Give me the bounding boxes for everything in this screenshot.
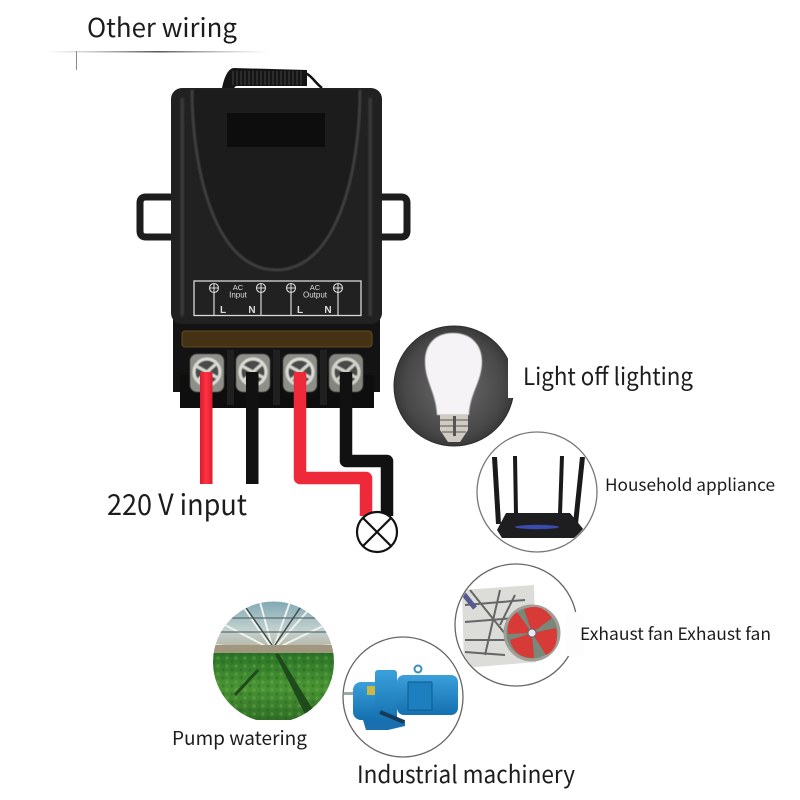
icon: greenhouse bbox=[212, 600, 336, 722]
label: Pump watering: Pump watering bbox=[172, 724, 307, 751]
icon: router bbox=[477, 432, 597, 552]
amber cover strip bbox=[182, 331, 372, 347]
left mounting ear bbox=[140, 197, 171, 237]
input wire: black neutral bbox=[246, 372, 258, 484]
terminal label plate: AC bbox=[233, 283, 244, 292]
label: 220 V input: 220 V input bbox=[107, 482, 247, 524]
label: Exhaust fan Exhaust fan: Exhaust fan Exhaust fan bbox=[580, 620, 771, 645]
terminal label plate bbox=[194, 281, 361, 316]
output wire: black neutral to lamp bbox=[346, 372, 387, 516]
terminal label plate: Output bbox=[303, 290, 328, 300]
label: Industrial machinery: Industrial machinery bbox=[357, 755, 575, 790]
icon: light bulb bbox=[394, 326, 518, 446]
output wire: red live to lamp bbox=[300, 372, 366, 516]
terminal label plate: L bbox=[220, 305, 226, 316]
terminal block bbox=[173, 318, 380, 408]
title: Other wiring: Other wiring bbox=[87, 8, 237, 45]
wiring relay device bbox=[140, 68, 407, 408]
display window bbox=[227, 113, 325, 147]
terminal label plate: N bbox=[248, 305, 256, 316]
terminal label plate: Input bbox=[229, 290, 248, 300]
terminal label plate: N bbox=[324, 305, 332, 316]
right mounting ear bbox=[382, 197, 407, 237]
icon: exhaust fan bbox=[455, 564, 585, 686]
label: Light off lighting: Light off lighting bbox=[523, 357, 693, 392]
label: Household appliance: Household appliance bbox=[605, 471, 775, 496]
lamp symbol bbox=[357, 512, 397, 552]
device body bbox=[171, 88, 382, 324]
terminal screws bbox=[190, 354, 363, 392]
terminal label plate: AC bbox=[310, 283, 321, 292]
input wire: red live bbox=[200, 372, 212, 484]
icon: industrial motor bbox=[343, 637, 463, 757]
antenna coil bbox=[222, 68, 322, 88]
terminal label plate: L bbox=[297, 305, 303, 316]
